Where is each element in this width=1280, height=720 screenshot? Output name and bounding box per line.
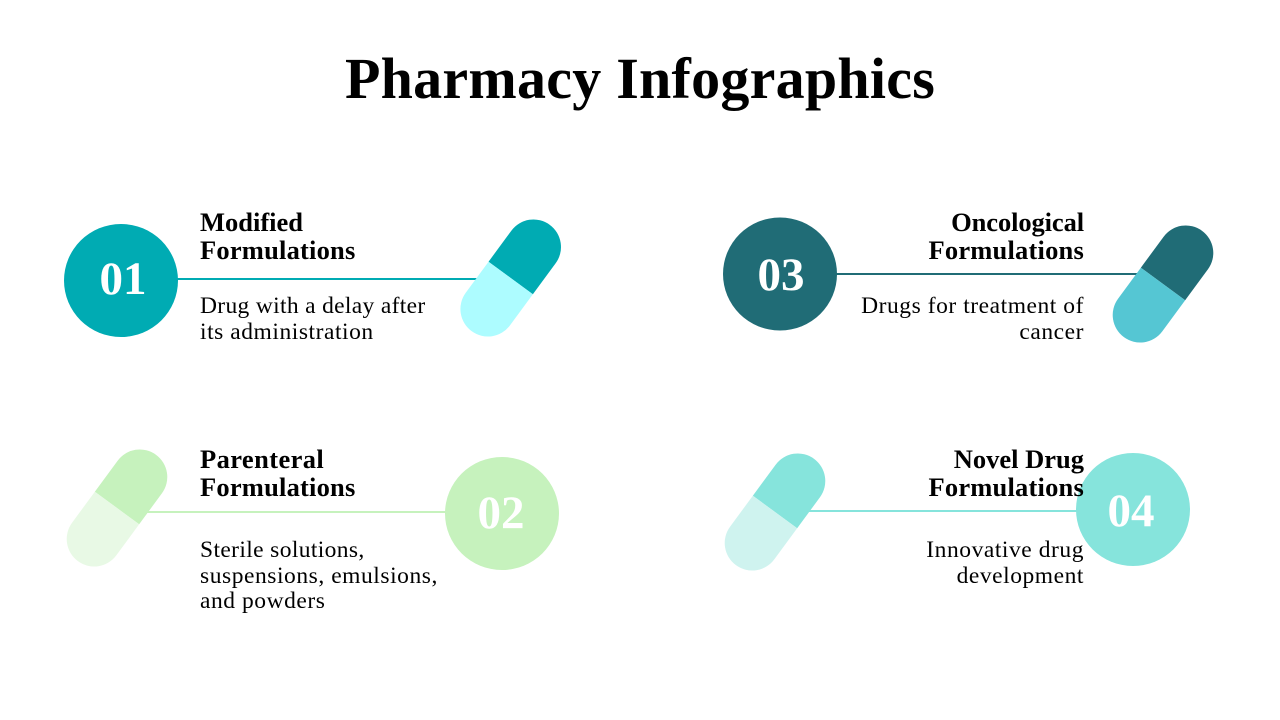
description 03 bbox=[861, 293, 1084, 344]
badge 02 bbox=[445, 457, 559, 570]
description 03: Drugs for treatment of bbox=[861, 293, 1084, 319]
description 04 bbox=[926, 537, 1084, 588]
badge 03: 03 bbox=[758, 249, 804, 301]
heading 02: Formulations bbox=[200, 472, 356, 502]
heading 04: Formulations bbox=[928, 472, 1084, 502]
description 02 bbox=[200, 537, 438, 614]
title: Pharmacy Infographics bbox=[345, 46, 935, 111]
description 02: suspensions, emulsions, bbox=[200, 562, 438, 588]
badge 02: 02 bbox=[478, 487, 524, 539]
heading 01: Modified bbox=[200, 207, 303, 237]
connector line 02 bbox=[140, 511, 450, 513]
connector line 03 bbox=[830, 273, 1140, 275]
badge 04 bbox=[1076, 453, 1190, 566]
heading 04 bbox=[928, 444, 1084, 502]
heading 02: Parenteral bbox=[200, 444, 324, 474]
description 02: Sterile solutions, bbox=[200, 537, 365, 563]
description 01: Drug with a delay after bbox=[200, 293, 426, 319]
heading 03 bbox=[928, 207, 1084, 265]
description 01 bbox=[200, 293, 426, 344]
heading 02 bbox=[200, 444, 356, 502]
badge 01 bbox=[64, 224, 178, 337]
heading 03: Oncological bbox=[951, 207, 1084, 237]
description 04: Innovative drug bbox=[926, 537, 1084, 563]
description 04: development bbox=[957, 562, 1084, 588]
description 03: cancer bbox=[1019, 318, 1084, 344]
connector line 04 bbox=[800, 510, 1085, 512]
badge 04: 04 bbox=[1108, 485, 1154, 537]
pill 02 bbox=[56, 439, 178, 577]
badge 01: 01 bbox=[100, 253, 146, 305]
description 01: its administration bbox=[200, 318, 374, 344]
heading 03: Formulations bbox=[928, 235, 1084, 265]
heading 01: Formulations bbox=[200, 235, 356, 265]
description 02: and powders bbox=[200, 588, 325, 614]
pill 04 bbox=[714, 443, 836, 581]
pill 03 bbox=[1102, 215, 1224, 353]
heading 04: Novel Drug bbox=[954, 444, 1084, 474]
heading 01 bbox=[200, 207, 356, 265]
pill 01 bbox=[449, 209, 572, 347]
badge 03 bbox=[723, 218, 837, 330]
connector line 01 bbox=[170, 278, 480, 280]
